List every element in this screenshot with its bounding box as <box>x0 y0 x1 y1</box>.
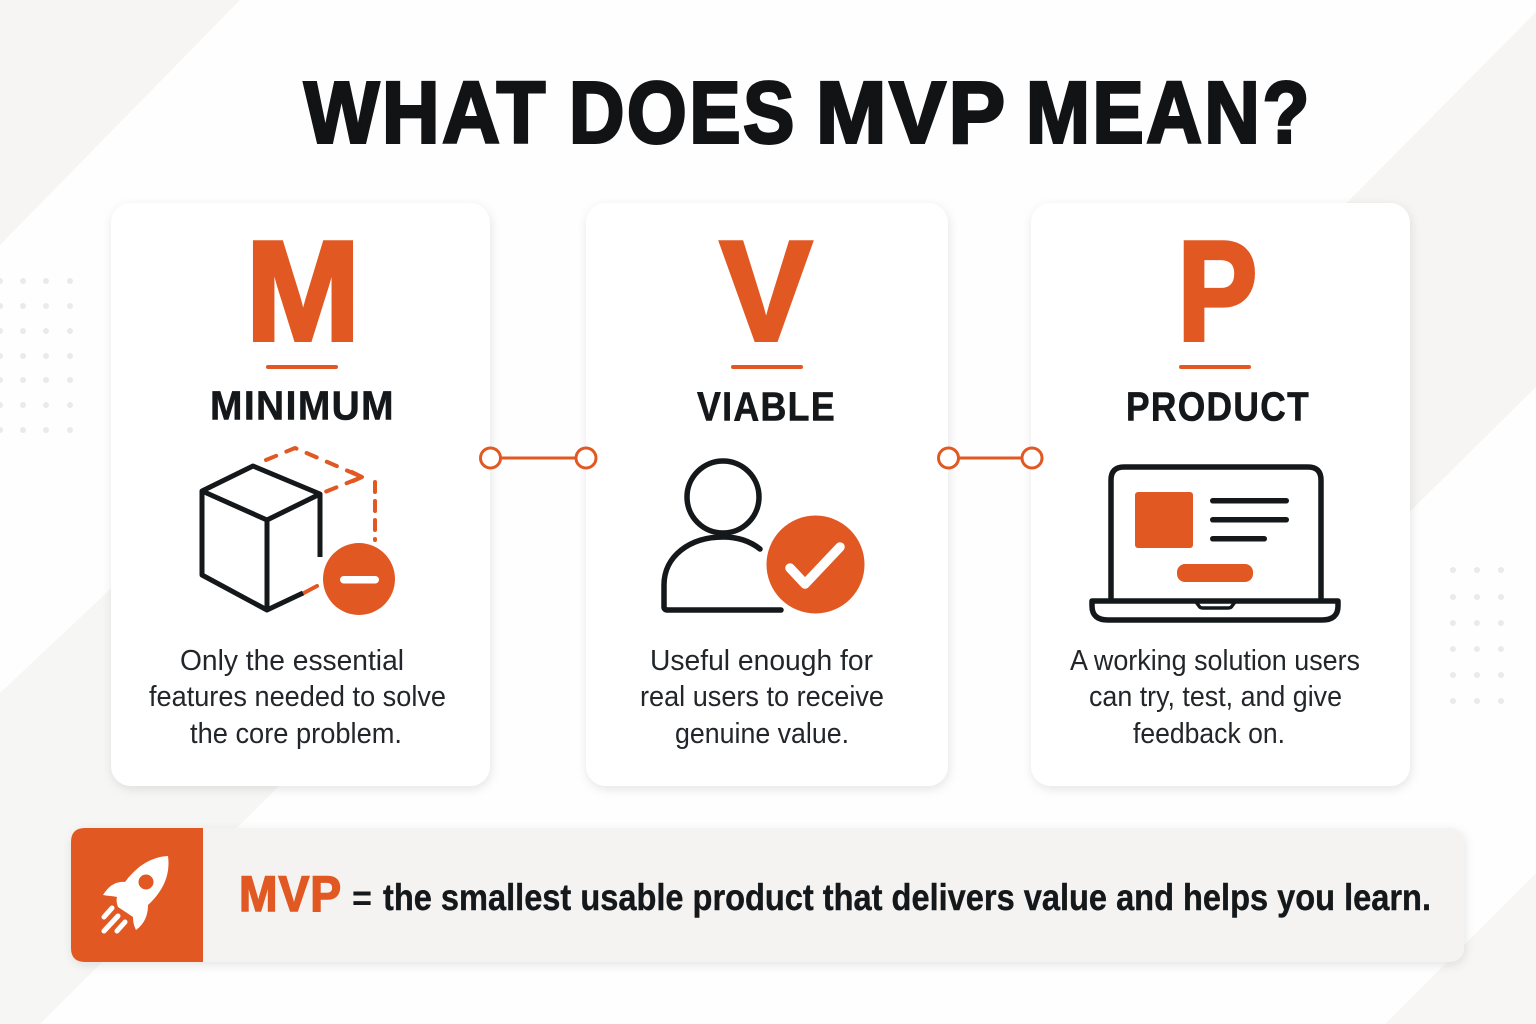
description: viable: Useful enough for <box>650 645 873 677</box>
description: viable <box>640 645 884 750</box>
summary text: = <box>352 877 372 918</box>
letter V: V <box>720 212 812 371</box>
title: MEAN? <box>1026 64 1312 162</box>
description: minimum <box>149 645 446 750</box>
description: viable: real users to receive <box>640 681 884 713</box>
icon: laptop <box>1092 467 1338 620</box>
connector: minimum to viable <box>480 448 596 468</box>
icon: cube with minus <box>202 448 395 615</box>
title: DOES <box>569 64 797 162</box>
heading: product: PRODUCT <box>1126 384 1310 430</box>
panel: minimum <box>111 203 490 786</box>
icon: rocket <box>71 828 203 962</box>
description: minimum: Only the essential <box>180 645 404 677</box>
connector: viable to product <box>938 448 1042 468</box>
heading: viable <box>697 365 836 430</box>
heading: product <box>1126 365 1310 430</box>
title: MVP <box>816 64 1008 162</box>
summary text <box>239 866 1431 922</box>
letter P: P <box>1177 212 1257 371</box>
panel: product <box>1031 203 1410 786</box>
description: minimum: features needed to solve <box>149 681 446 713</box>
description: product: A working solution users <box>1070 645 1360 677</box>
description: minimum: the core problem. <box>190 718 402 750</box>
summary text: MVP <box>239 866 342 922</box>
title <box>304 64 1312 162</box>
description: viable: genuine value. <box>675 718 849 750</box>
description: product: feedback on. <box>1133 718 1285 750</box>
panel: viable <box>586 203 948 786</box>
heading: minimum: MINIMUM <box>210 382 395 428</box>
description: product <box>1070 645 1360 750</box>
heading: viable: VIABLE <box>697 384 836 430</box>
icon: user with check <box>664 461 866 614</box>
summary banner <box>71 828 1464 962</box>
heading: minimum <box>210 365 395 428</box>
title: WHAT <box>304 64 548 162</box>
description: product: can try, test, and give <box>1089 681 1342 713</box>
letter M: M <box>246 212 360 371</box>
